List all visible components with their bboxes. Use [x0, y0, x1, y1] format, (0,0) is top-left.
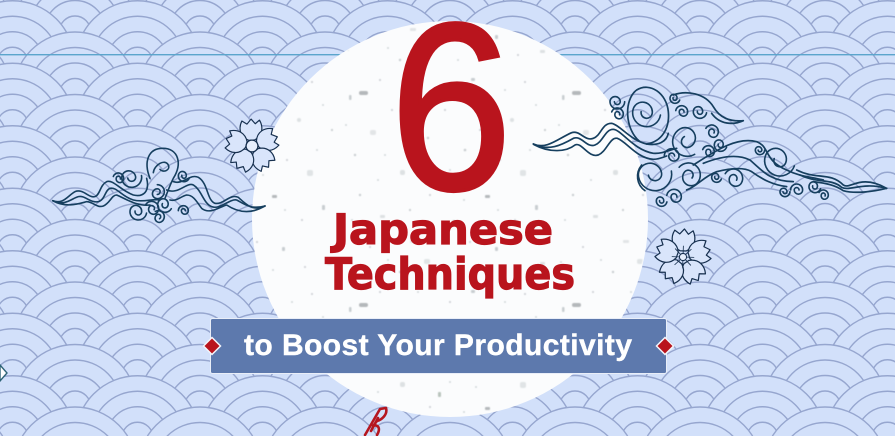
icon: cherry blossom left — [222, 118, 282, 176]
icon: right swirl cloud — [533, 87, 887, 207]
horizontal blue guide line — [0, 54, 895, 55]
banner left diamond — [204, 338, 220, 354]
heading: Japanese: Japanese — [330, 205, 553, 254]
icon: left swirl cloud — [53, 148, 265, 224]
heading: Techniques: Techniques — [325, 249, 575, 300]
banner right diamond — [656, 338, 674, 354]
left edge diamond — [0, 365, 7, 381]
banner text: to Boost Your Productivity — [244, 329, 632, 362]
subtitle banner — [204, 318, 674, 374]
red brush mark at bottom — [365, 408, 386, 435]
paper circle panel — [252, 21, 648, 417]
icon: cherry blossom right — [652, 228, 714, 287]
